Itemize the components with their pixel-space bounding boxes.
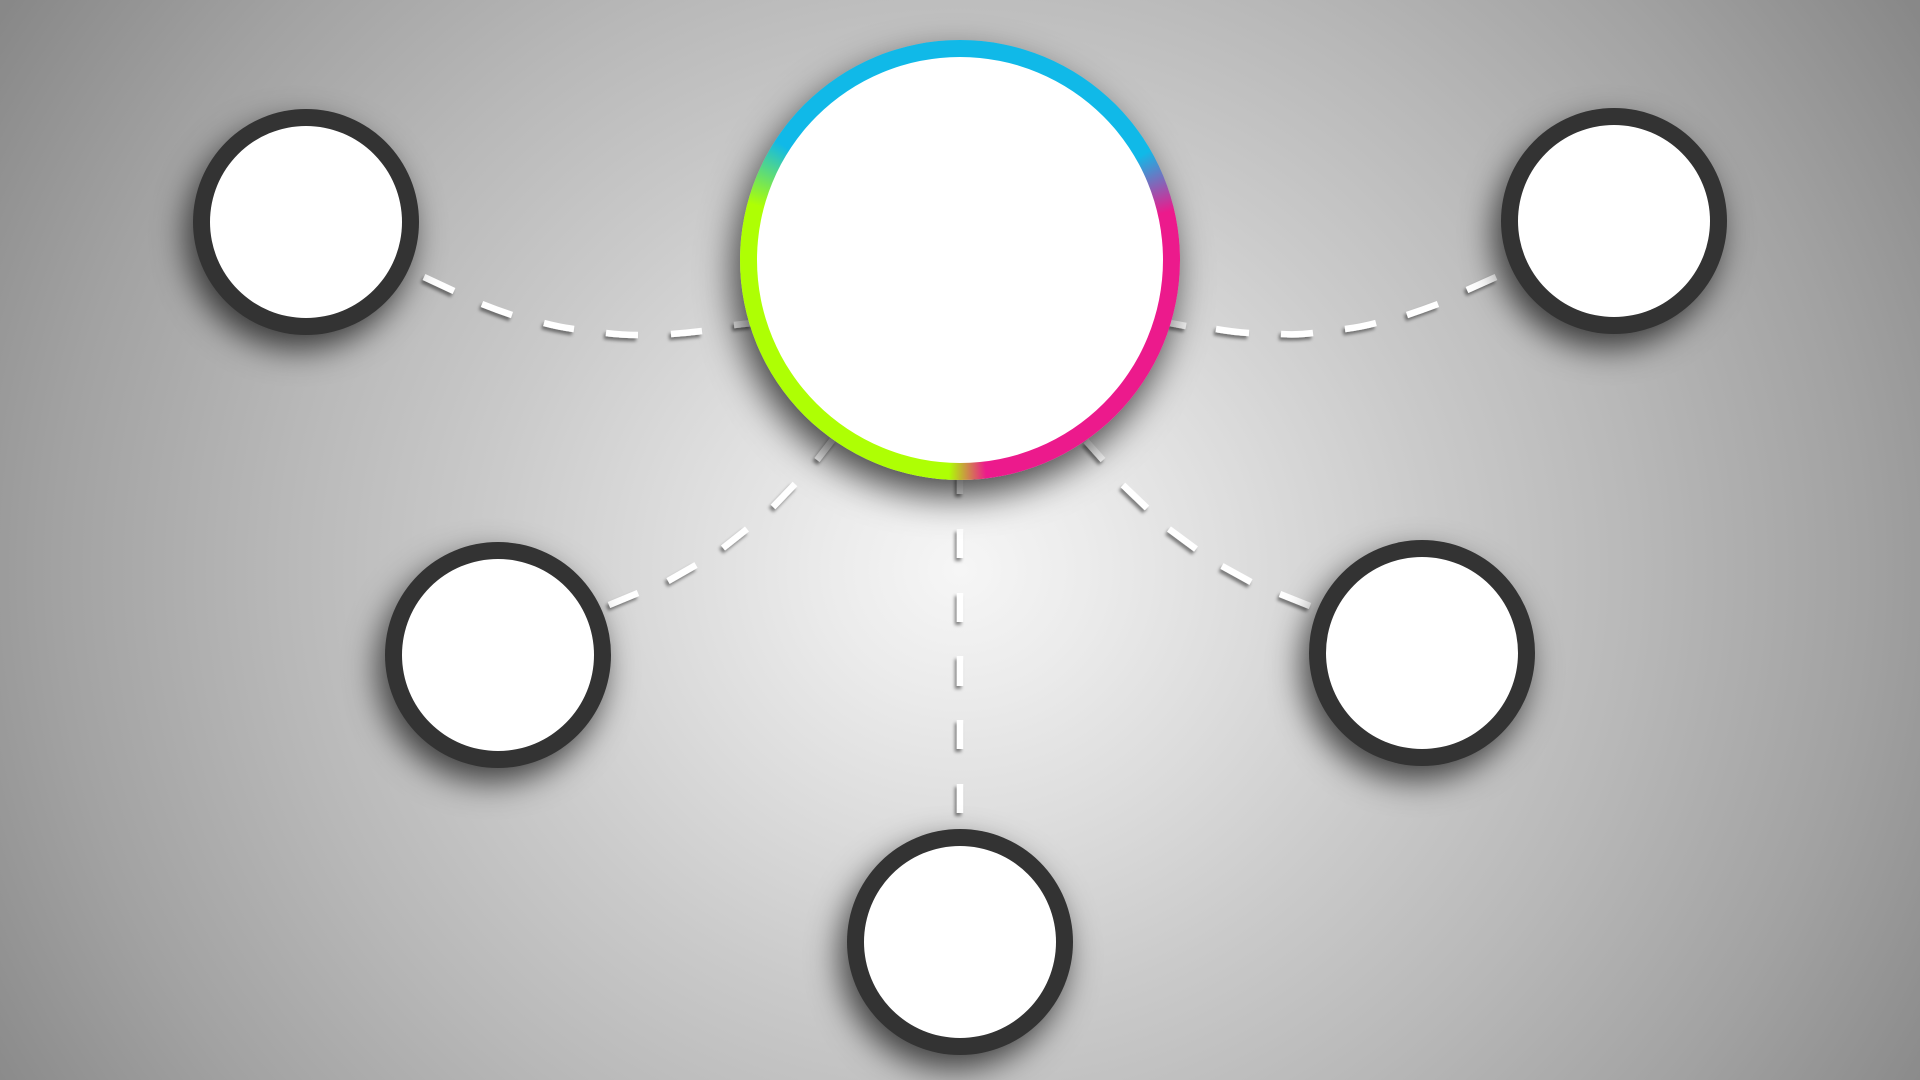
node: bottom (847, 829, 1073, 1055)
node: top right (1501, 108, 1727, 334)
connector: hub to top-right node (1170, 277, 1496, 334)
connector: hub to top-left node (424, 277, 752, 335)
central hub with multicolour ring (740, 40, 1180, 480)
connector: hub to lower-left node (609, 438, 834, 605)
node: top left (193, 109, 419, 335)
connector: hub to lower-right node (1086, 441, 1310, 606)
connector: hub to bottom node (957, 476, 963, 813)
node: lower left (385, 542, 611, 768)
node: lower right (1309, 540, 1535, 766)
